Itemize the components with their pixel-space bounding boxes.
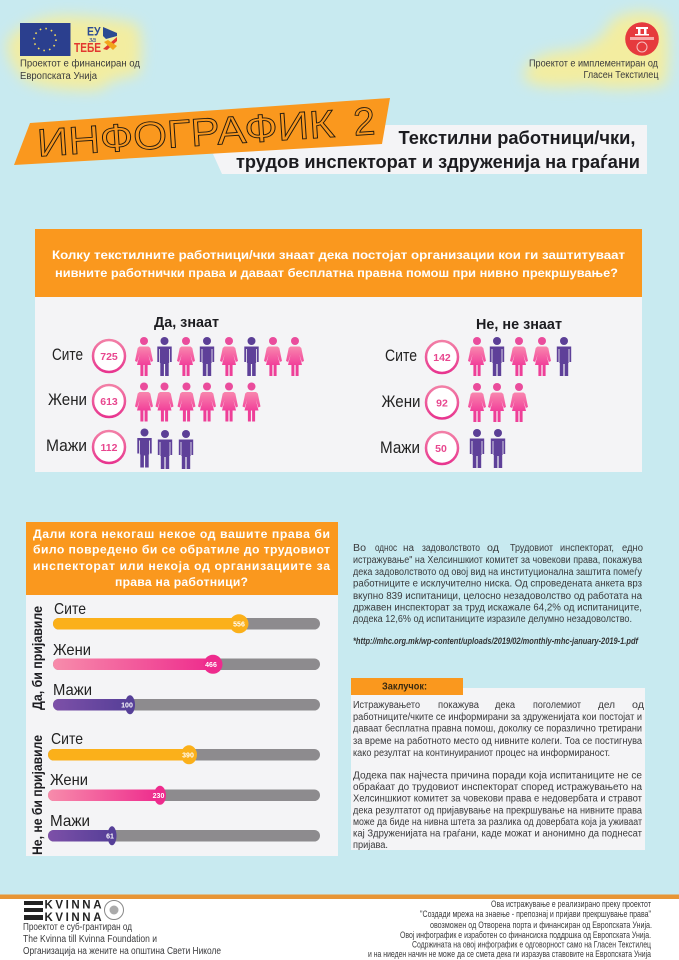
text block: conclusion: дека xyxy=(495,700,515,711)
title banner xyxy=(14,98,390,165)
heading: report question: права на работници? xyxy=(115,575,248,589)
label: no, would not report: Не, не би пријавиле xyxy=(30,735,45,855)
text block: conclusion: како резултат на континуираниот процес на информираност. xyxy=(353,747,610,759)
text block: conclusion: од xyxy=(632,700,644,711)
panel: awareness xyxy=(35,229,642,472)
text block: labour inspectorate: едно xyxy=(622,543,643,554)
chart: yes, they know: Мажи xyxy=(46,436,87,455)
text block: labour inspectorate: Во xyxy=(353,543,366,554)
bar chart: no, would not report: Жени xyxy=(50,772,88,789)
header right: implementer xyxy=(524,12,668,88)
chart: yes, they know: 725 xyxy=(100,351,118,363)
text block: labour inspectorate: истражување" на Хелсиншкиот комитет за човекови права, покажува xyxy=(353,555,642,566)
icon: EU flag xyxy=(20,23,70,56)
text block: labour inspectorate: државен инспекторат за труд искажале 64,2% од испитаниците, xyxy=(353,602,642,614)
text: implemented by: Гласен Текстилец xyxy=(584,70,659,81)
chart: yes, they know: Да, знаат xyxy=(154,314,219,331)
text block: conclusion: поголемиот xyxy=(533,700,581,711)
bar chart: yes, would report: 100 xyxy=(121,702,133,709)
text block: labour inspectorate: од xyxy=(487,543,499,554)
logo: EU za tebe xyxy=(74,26,117,55)
text: sub-granted by: The Kvinna till Kvinna Foundation и xyxy=(23,934,157,945)
text block: conclusion: работниците/чките се информирани за здруженијата кои постојат и xyxy=(353,711,642,723)
bar chart: yes, would report: Мажи xyxy=(53,682,92,699)
text block: conclusion: кај Здруженијата на граѓани, каде можат и анонимно да поднесат xyxy=(353,828,642,840)
chart: no, they do not know: Жени xyxy=(382,392,420,411)
text: implemented by: Проектот е имплементиран од xyxy=(529,58,658,70)
text: implemented by xyxy=(529,58,659,81)
chart: yes, they know: Сите xyxy=(52,345,83,364)
panel: would report xyxy=(26,522,338,856)
chart: no, they do not know: Мажи xyxy=(380,438,420,457)
text block: conclusion: за време на работното место од нивните колеги. Тоа се постигнува xyxy=(353,735,642,747)
text block: conclusion: Хелсиншкиот комитет за човекови права е недовербата и стравот xyxy=(353,792,642,804)
bar chart: yes, would report xyxy=(53,601,320,714)
bar chart: no, would not report: 230 xyxy=(153,793,164,800)
chart: yes, they know xyxy=(46,314,304,469)
text: sub-granted by xyxy=(23,921,221,957)
chart: no, they do not know: 142 xyxy=(433,352,451,364)
text block: labour inspectorate: на xyxy=(403,543,414,554)
text: sub-granted by: Проектот е суб-грантиран од xyxy=(23,921,132,933)
bar chart: yes, would report: 466 xyxy=(205,662,217,669)
heading: awareness question xyxy=(52,248,625,280)
text block: conclusion: обраќаат до трудовиот инспекторат според истражувањето на xyxy=(353,781,642,793)
text: disclaimer xyxy=(368,899,652,959)
logo: EU za tebe: за xyxy=(88,37,96,44)
text block: conclusion: дел xyxy=(598,700,615,711)
text block: labour inspectorate: задоволството xyxy=(422,543,480,554)
header left: EU funding xyxy=(8,16,141,90)
text block: labour inspectorate: однос xyxy=(375,543,397,554)
text block: labour inspectorate: вкупно 839 испитаници, целосно незадоволство од работата на xyxy=(353,590,642,602)
chart: yes, they know: 613 xyxy=(100,396,118,408)
text block: labour inspectorate: работниците е исклучително ниска. Од спроведената анкета врз xyxy=(353,578,642,590)
chart: no, they do not know: Сите xyxy=(385,346,417,365)
bar chart: no, would not report: 61 xyxy=(106,833,114,840)
heading: subtitle: Текстилни работници/чки, xyxy=(398,128,636,148)
logo: EU za tebe: ЕУ xyxy=(87,26,101,38)
text block: conclusion: може да биде на нивна штета за разлика од довербата која ја уживаат xyxy=(353,816,642,828)
heading: report question: било повредено би се обратиле до трудовиот xyxy=(33,542,330,556)
chart: yes, they know: Жени xyxy=(48,390,87,409)
text block: conclusion: покажува xyxy=(438,700,479,711)
bar chart: no, would not report: Сите xyxy=(51,731,83,748)
logo: Kvinna till Kvinna xyxy=(24,900,124,924)
conclusion tab xyxy=(351,678,463,695)
logo: EU za tebe: ТЕБЕ xyxy=(74,41,101,55)
subtitle strip xyxy=(213,125,647,174)
bar chart: no, would not report: Мажи xyxy=(50,813,90,830)
logo: Kvinna till Kvinna: KVINNA xyxy=(44,912,102,924)
logo: Glasen Tekstilec xyxy=(625,22,659,56)
logo: Kvinna till Kvinna: KVINNA xyxy=(44,900,102,912)
title: ИНФОГРАФИК xyxy=(36,103,336,165)
text block: conclusion: Истражувањето xyxy=(353,700,420,711)
panel: conclusion xyxy=(351,678,645,851)
heading: report question: инспекторат или некоја од организациите за xyxy=(33,559,330,573)
text block: labour inspectorate: инспекторат, xyxy=(560,543,614,554)
text: funded by xyxy=(20,58,140,82)
heading: awareness question: Колку текстилните работници/чки знаат дека постојат организации кои ги заштитуваат xyxy=(52,248,625,262)
text block: labour inspectorate: додека 12,6% од испитаниците изразиле делумно незадоволство. xyxy=(353,614,632,625)
bar chart: yes, would report: 556 xyxy=(233,621,245,628)
bar chart: no, would not report xyxy=(48,731,320,845)
bar chart: yes, would report: Жени xyxy=(53,642,91,659)
text: sub-granted by: Организација на жените на општина Свети Николе xyxy=(23,946,221,957)
label: yes, would report: Да, би пријавиле xyxy=(30,606,45,710)
chart: yes, they know: 112 xyxy=(101,442,118,454)
text: funded by: Проектот е финансиран од xyxy=(20,58,140,70)
title: 2 xyxy=(352,100,377,144)
heading: report question xyxy=(33,527,330,589)
conclusion tab: Заклучок: xyxy=(382,682,427,692)
text block: conclusion xyxy=(353,700,644,851)
heading: report question: Дали кога некогаш некое од вашите права би xyxy=(33,527,330,541)
text: funded by: Европската Унија xyxy=(20,71,97,82)
bar chart: yes, would report: Сите xyxy=(54,601,86,618)
chart: no, they do not know: Не, не знаат xyxy=(476,316,562,333)
heading: subtitle: трудов инспекторат и здруженија на граѓани xyxy=(236,152,640,172)
text block: labour inspectorate: Трудовиот xyxy=(510,543,553,554)
chart: no, they do not know xyxy=(380,316,571,468)
chart: no, they do not know: 92 xyxy=(436,398,448,410)
heading: subtitle xyxy=(236,128,640,172)
chart: no, they do not know: 50 xyxy=(435,443,447,455)
text block: conclusion: дека резултатот од пријавување на прекршување на нивните права xyxy=(353,806,642,816)
footer xyxy=(0,894,679,960)
bar chart: no, would not report: 390 xyxy=(182,752,194,759)
text block: conclusion: даваат бесплатна правна помош, доколку се поразлично третирани xyxy=(353,722,642,734)
heading: awareness question: нивните работнички права и даваат бесплатна правна помош при нивно прекршување? xyxy=(55,266,618,280)
text block: conclusion: Додека пак најчеста причина поради која испитаниците не се xyxy=(353,770,642,782)
text block: conclusion: пријава. xyxy=(353,840,388,851)
text block: labour inspectorate: дека задоволството од овој вид на институционална заштита помеѓу xyxy=(353,567,642,578)
text block: labour inspectorate xyxy=(353,543,643,647)
